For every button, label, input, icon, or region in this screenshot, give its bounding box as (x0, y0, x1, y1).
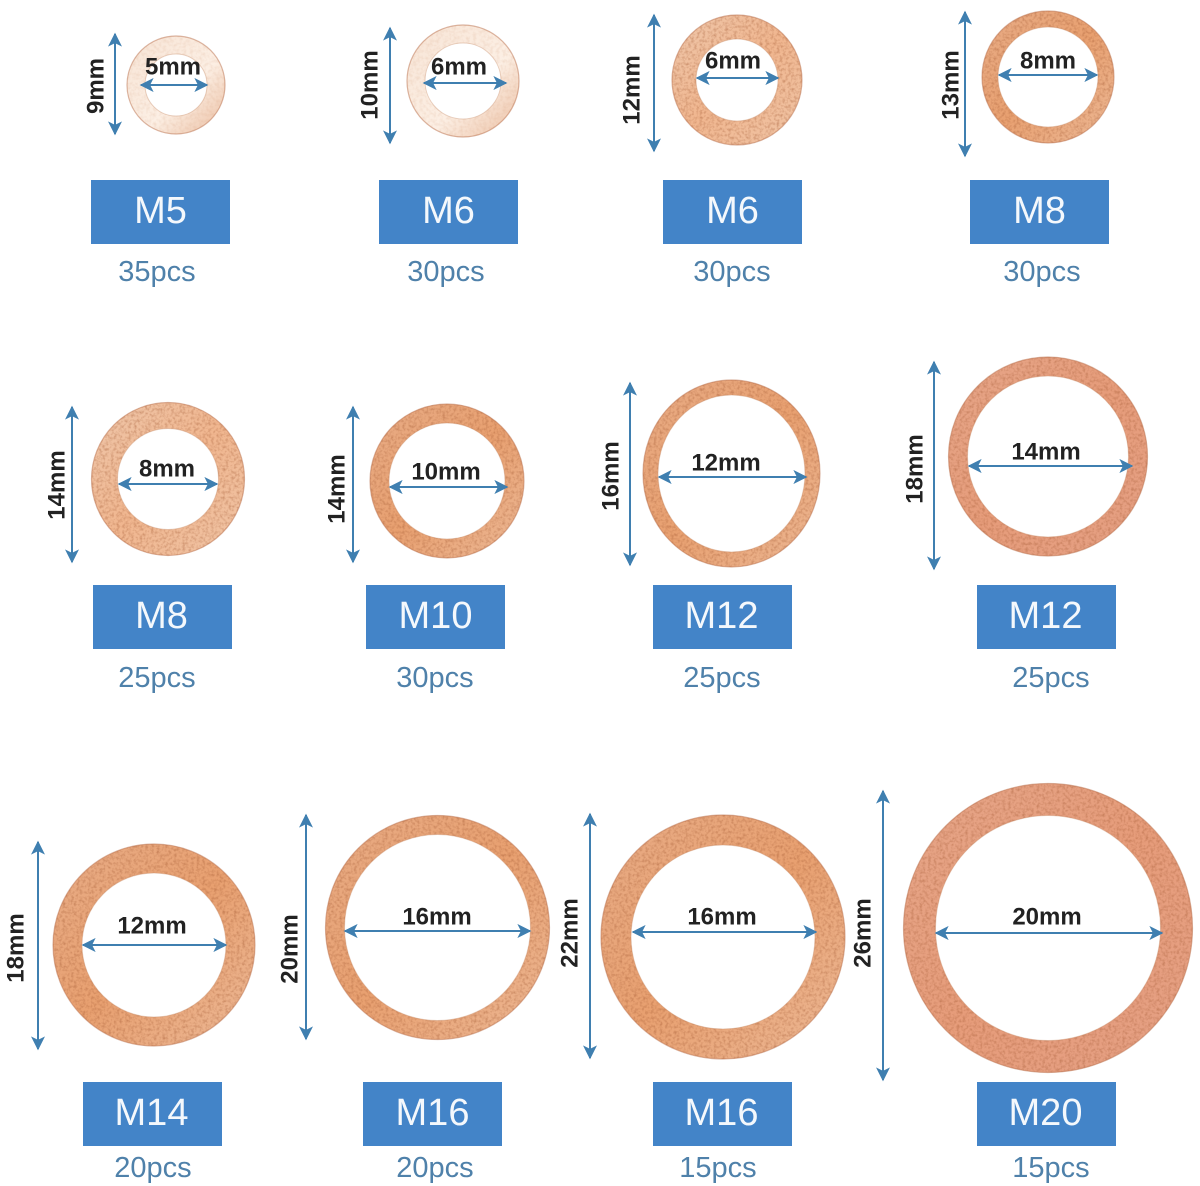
outer diameter arrow (933, 362, 935, 569)
inner diameter arrow (969, 465, 1132, 467)
inner diameter arrow (141, 84, 207, 86)
size badge: M6 (706, 190, 759, 232)
outer diameter label: 14mm (324, 454, 350, 524)
outer diameter label: 9mm (82, 58, 110, 114)
inner diameter label: 14mm (1011, 438, 1081, 466)
size badge: M8 (1013, 190, 1066, 232)
washer: 14mm outer, 10mm inner (370, 404, 524, 558)
quantity: 25pcs (683, 662, 761, 694)
size badge: M16 (685, 1092, 758, 1134)
quantity: 15pcs (1012, 1152, 1090, 1184)
washer: 12mm outer, 6mm inner (672, 15, 802, 145)
outer diameter label: 10mm (356, 50, 384, 120)
size badge: M6 (422, 190, 475, 232)
inner diameter arrow (119, 483, 217, 485)
outer diameter arrow (882, 791, 884, 1080)
inner diameter label: 12mm (117, 912, 187, 940)
size badge: M14 (115, 1092, 188, 1134)
inner diameter arrow (659, 476, 806, 478)
inner diameter label: 12mm (691, 450, 761, 476)
washer: 14mm outer, 8mm inner (92, 402, 244, 556)
item: M20 washer 26mm, 15pcs (850, 784, 1192, 1184)
outer diameter arrow (629, 383, 631, 565)
size badge: M12 (1009, 595, 1082, 637)
size badge (83, 1082, 222, 1146)
item: M6 washer 10mm, 30pcs (356, 25, 519, 288)
washer: 10mm outer, 6mm inner (407, 25, 519, 137)
size badge (653, 585, 792, 649)
item: M12 washer 18mm, 25pcs (902, 357, 1148, 694)
outer diameter label: 16mm (598, 441, 624, 511)
size badge (653, 1082, 792, 1146)
outer diameter arrow (589, 814, 591, 1058)
size badge: M16 (396, 1092, 469, 1134)
inner diameter arrow (936, 932, 1162, 934)
outer diameter arrow (964, 12, 966, 156)
inner diameter label: 6mm (705, 48, 761, 74)
quantity: 30pcs (693, 256, 771, 288)
inner diameter arrow (83, 944, 226, 946)
washer: 18mm outer, 14mm inner (948, 357, 1148, 556)
outer diameter arrow (37, 842, 39, 1049)
size badge: M5 (134, 190, 187, 232)
size badge (977, 1082, 1116, 1146)
inner diameter arrow (424, 82, 506, 84)
outer diameter label: 26mm (850, 898, 876, 968)
outer diameter label: 22mm (556, 898, 584, 968)
inner diameter arrow (999, 74, 1097, 76)
item: M12 washer 16mm, 25pcs (598, 380, 820, 694)
outer diameter arrow (114, 34, 116, 134)
size badge (977, 585, 1116, 649)
inner diameter arrow (345, 930, 530, 932)
washer: 13mm outer, 8mm inner (982, 11, 1114, 143)
inner diameter arrow (633, 931, 816, 933)
size badge: M10 (399, 595, 472, 637)
inner diameter label: 16mm (687, 904, 757, 930)
size badge: M20 (1009, 1092, 1082, 1134)
inner diameter label: 10mm (411, 458, 481, 486)
inner diameter label: 5mm (145, 54, 201, 80)
quantity: 20pcs (396, 1152, 474, 1184)
outer diameter arrow (389, 28, 391, 143)
outer diameter label: 20mm (276, 914, 304, 984)
size badge: M12 (685, 595, 758, 637)
inner diameter label: 16mm (402, 904, 472, 930)
outer diameter label: 18mm (2, 913, 30, 983)
outer diameter label: 18mm (902, 434, 928, 504)
item: M14 washer 18mm, 20pcs (2, 842, 255, 1184)
item: M8 washer 13mm, 30pcs (938, 11, 1114, 288)
quantity: 30pcs (407, 256, 485, 288)
quantity: 15pcs (679, 1152, 757, 1184)
size badge (379, 180, 518, 244)
size badge (93, 585, 232, 649)
quantity: 35pcs (118, 256, 196, 288)
item: M16 washer 22mm, 15pcs (556, 814, 845, 1184)
outer diameter arrow (305, 815, 307, 1039)
washer: 9mm outer, 5mm inner (127, 36, 225, 134)
item: M6 washer 12mm, 30pcs (618, 15, 802, 288)
size badge (363, 1082, 502, 1146)
inner diameter label: 8mm (139, 456, 195, 482)
inner diameter arrow (390, 486, 507, 488)
outer diameter label: 13mm (938, 50, 964, 120)
item: M10 washer 14mm, 30pcs (324, 404, 524, 694)
outer diameter label: 14mm (44, 450, 70, 520)
quantity: 30pcs (1003, 256, 1081, 288)
quantity: 25pcs (1012, 662, 1090, 694)
item: M8 washer 14mm, 25pcs (44, 402, 244, 694)
quantity: 30pcs (396, 662, 474, 694)
item: M5 washer, 35pcs (82, 34, 230, 288)
washer: 22mm outer, 16mm inner (601, 815, 845, 1059)
size badge (91, 180, 230, 244)
outer diameter arrow (653, 15, 655, 151)
washer: 26mm outer, 20mm inner (904, 784, 1192, 1072)
inner diameter label: 20mm (1012, 904, 1082, 930)
washer: 20mm outer, 16mm inner (326, 816, 550, 1040)
size badge (366, 585, 505, 649)
size badge: M8 (135, 595, 188, 637)
washer: 16mm outer, 12mm inner (643, 380, 820, 567)
outer diameter arrow (71, 407, 73, 562)
size badge (970, 180, 1109, 244)
item: M16 washer 20mm, 20pcs (276, 815, 550, 1184)
washer: 18mm outer, 12mm inner (53, 844, 255, 1046)
outer diameter arrow (352, 407, 354, 562)
inner diameter label: 6mm (431, 54, 487, 80)
inner diameter arrow (697, 77, 778, 79)
outer diameter label: 12mm (618, 55, 646, 125)
quantity: 25pcs (118, 662, 196, 694)
inner diameter label: 8mm (1020, 48, 1076, 74)
size badge (663, 180, 802, 244)
quantity: 20pcs (114, 1152, 192, 1184)
